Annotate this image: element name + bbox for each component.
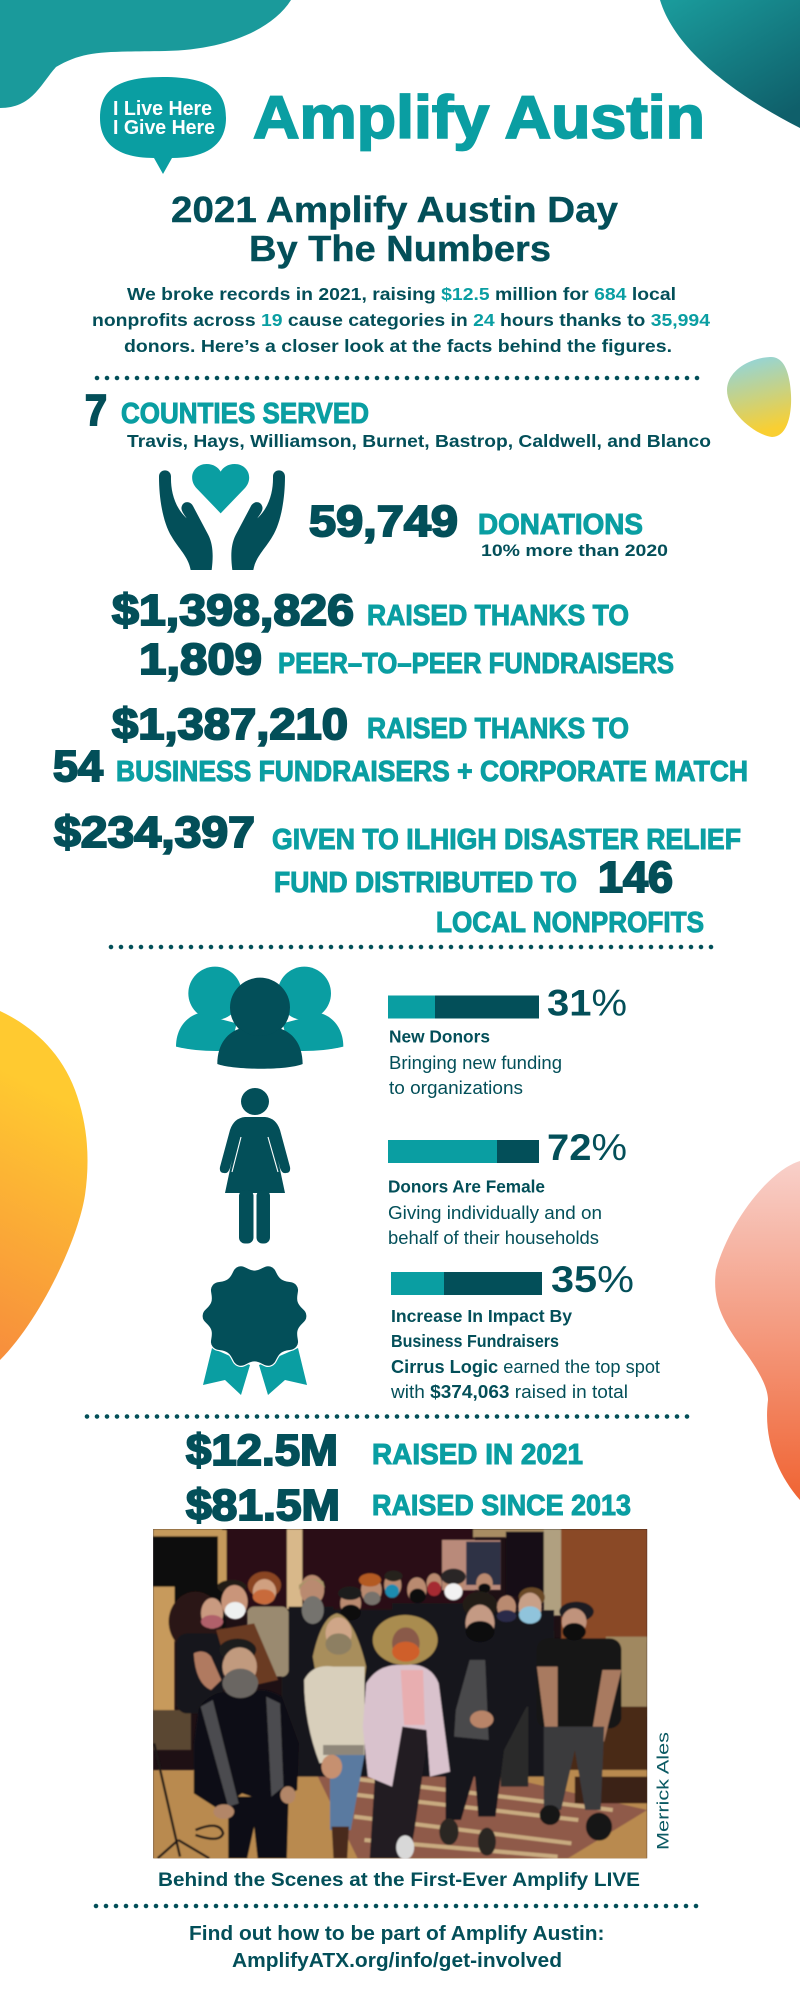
- stat: raised totals: RAISED SINCE 2013: [372, 1490, 631, 1522]
- icon: group of people: [176, 967, 343, 1069]
- stat: counties served: [85, 386, 711, 451]
- stat: female donors 72%: Giving individually and on: [388, 1202, 602, 1223]
- stat: peer-to-peer fundraising: 1,809: [139, 635, 262, 684]
- stat: business fundraising: [53, 700, 748, 791]
- stat: business impact 35%: Business Fundraisers: [391, 1331, 559, 1351]
- intro paragraph: donors. Here’s a closer look at the facts behind the figures.: [124, 336, 672, 356]
- stat: female donors 72%: 72%: [547, 1127, 627, 1168]
- stat: raised totals: [186, 1426, 631, 1530]
- stat: donations: 59,749: [309, 497, 458, 546]
- icon: award ribbon: [202, 1266, 307, 1395]
- stat: raised totals: $81.5M: [186, 1481, 340, 1530]
- stat: peer-to-peer fundraising: RAISED THANKS TO: [367, 600, 629, 632]
- stat: raised totals: RAISED IN 2021: [372, 1439, 583, 1471]
- call to action: Find out how to be part of Amplify Austin:: [189, 1923, 604, 1945]
- intro paragraph: nonprofits across 19 cause categories in 24 hours thanks to 35,994: [92, 310, 710, 330]
- stat: disaster relief: LOCAL NONPROFITS: [436, 907, 704, 939]
- stat: business impact 35%: Increase In Impact By: [391, 1306, 572, 1326]
- stat: new donors 31%: to organizations: [389, 1077, 523, 1098]
- decorative blob: top right teal gradient: [660, 0, 800, 128]
- stat: business impact 35%: Cirrus Logic earned the top spot: [391, 1356, 660, 1377]
- stat: new donors 31%: Bringing new funding: [389, 1052, 562, 1073]
- stat: raised totals: $12.5M: [186, 1426, 338, 1475]
- icon: hands holding heart: [159, 464, 285, 570]
- stat: business impact 35%: [390, 1259, 660, 1402]
- photo credit: Merrick Ales: [654, 1732, 672, 1850]
- logo: speech bubble: I Give Here: [113, 117, 215, 139]
- stat: counties served: Travis, Hays, Williamson, Burnet, Bastrop, Caldwell, and Blanco: [127, 431, 711, 451]
- decorative blob: right salmon: [715, 1161, 800, 1500]
- title: By The Numbers: [249, 228, 551, 269]
- stat: peer-to-peer fundraising: [112, 586, 674, 684]
- title: [171, 189, 618, 269]
- stat: new donors 31%: 31%: [547, 982, 627, 1024]
- stat: donations: [309, 497, 668, 560]
- stat: donations: DONATIONS: [478, 509, 643, 541]
- photo caption: Behind the Scenes at the First-Ever Amplify LIVE: [158, 1869, 640, 1891]
- logo wordmark: Amplify Austin: [253, 84, 705, 151]
- decorative blob: left orange: [0, 1011, 88, 1360]
- stat: peer-to-peer fundraising: $1,398,826: [112, 586, 354, 635]
- stat: business fundraising: 54: [53, 742, 104, 791]
- stat: business fundraising: BUSINESS FUNDRAISERS + CORPORATE MATCH: [116, 756, 748, 788]
- stat: business impact 35%: with $374,063 raised in total: [390, 1381, 628, 1402]
- stat: disaster relief: FUND DISTRIBUTED TO: [274, 867, 577, 899]
- call to action: [189, 1923, 604, 1972]
- stat: disaster relief: [54, 808, 741, 939]
- intro paragraph: [92, 284, 710, 356]
- stat: business fundraising: $1,387,210: [112, 700, 348, 749]
- crowd filler: [282, 1610, 554, 1777]
- stat: business fundraising: RAISED THANKS TO: [367, 713, 629, 745]
- logo: speech bubble: I Live Here: [113, 98, 212, 120]
- stat: counties served: COUNTIES SERVED: [121, 398, 369, 430]
- stat: peer-to-peer fundraising: PEER–TO–PEER FUNDRAISERS: [278, 648, 674, 680]
- icon: woman: [220, 1088, 290, 1244]
- stat: counties served: 7: [85, 386, 107, 435]
- stat: new donors 31%: New Donors: [389, 1026, 490, 1046]
- stat: female donors 72%: [388, 1127, 627, 1248]
- decorative blob: top left teal: [0, 0, 291, 108]
- call to action: AmplifyATX.org/info/get-involved: [232, 1950, 562, 1972]
- stat: female donors 72%: behalf of their households: [388, 1227, 599, 1248]
- photo: group behind the scenes: [153, 1529, 647, 1860]
- stat: business impact 35%: 35%: [551, 1259, 634, 1300]
- title: 2021 Amplify Austin Day: [171, 189, 618, 230]
- stat: disaster relief: $234,397: [54, 808, 255, 857]
- decorative blob: small blue-yellow: [727, 357, 791, 437]
- stat: disaster relief: 146: [598, 853, 673, 902]
- stat: donations: 10% more than 2020: [481, 541, 668, 560]
- stat: disaster relief: GIVEN TO ILHIGH DISASTER RELIEF: [272, 824, 741, 856]
- logo: speech bubble: [100, 77, 226, 174]
- stat: female donors 72%: Donors Are Female: [388, 1176, 545, 1196]
- intro paragraph: We broke records in 2021, raising $12.5 million for 684 local: [127, 284, 676, 304]
- stat: new donors 31%: [388, 982, 627, 1098]
